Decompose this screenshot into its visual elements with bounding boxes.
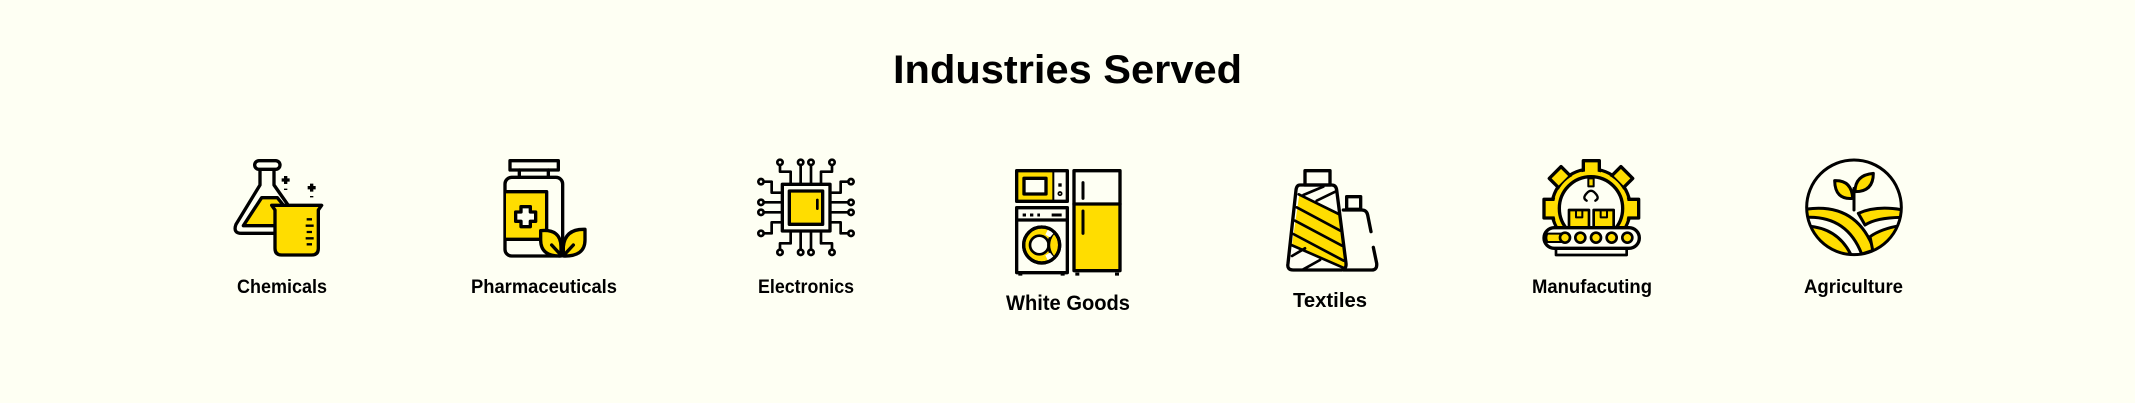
icon: thread spools — [1288, 171, 1377, 270]
label: chemicals: Chemicals — [237, 277, 327, 298]
panel: white goods — [1006, 171, 1130, 315]
icon: gear with conveyor belt — [1544, 161, 1639, 255]
label: agriculture: Agriculture — [1804, 277, 1903, 298]
panel: textiles — [1288, 171, 1377, 312]
icon: microchip — [758, 160, 854, 255]
label: pharmaceuticals: Pharmaceuticals — [471, 277, 617, 298]
icon: medicine bottle with leaves — [505, 161, 585, 256]
panel: chemicals — [235, 161, 327, 298]
panel: manufacturing — [1532, 161, 1652, 298]
panel: agriculture — [1804, 160, 1903, 298]
icon: flask and beaker — [235, 161, 322, 255]
label: textiles: Textiles — [1293, 290, 1367, 312]
panel: electronics — [758, 160, 854, 298]
panel: pharmaceuticals — [471, 161, 617, 298]
label: manufacturing: Manufacuting — [1532, 277, 1652, 298]
label: electronics: Electronics — [758, 277, 854, 298]
title: Industries Served — [893, 48, 1242, 92]
icon: sprout over fields in a circle — [1805, 160, 1903, 257]
label: white goods: White Goods — [1006, 292, 1130, 315]
icon: microwave, washing machine and fridge — [1017, 171, 1120, 276]
